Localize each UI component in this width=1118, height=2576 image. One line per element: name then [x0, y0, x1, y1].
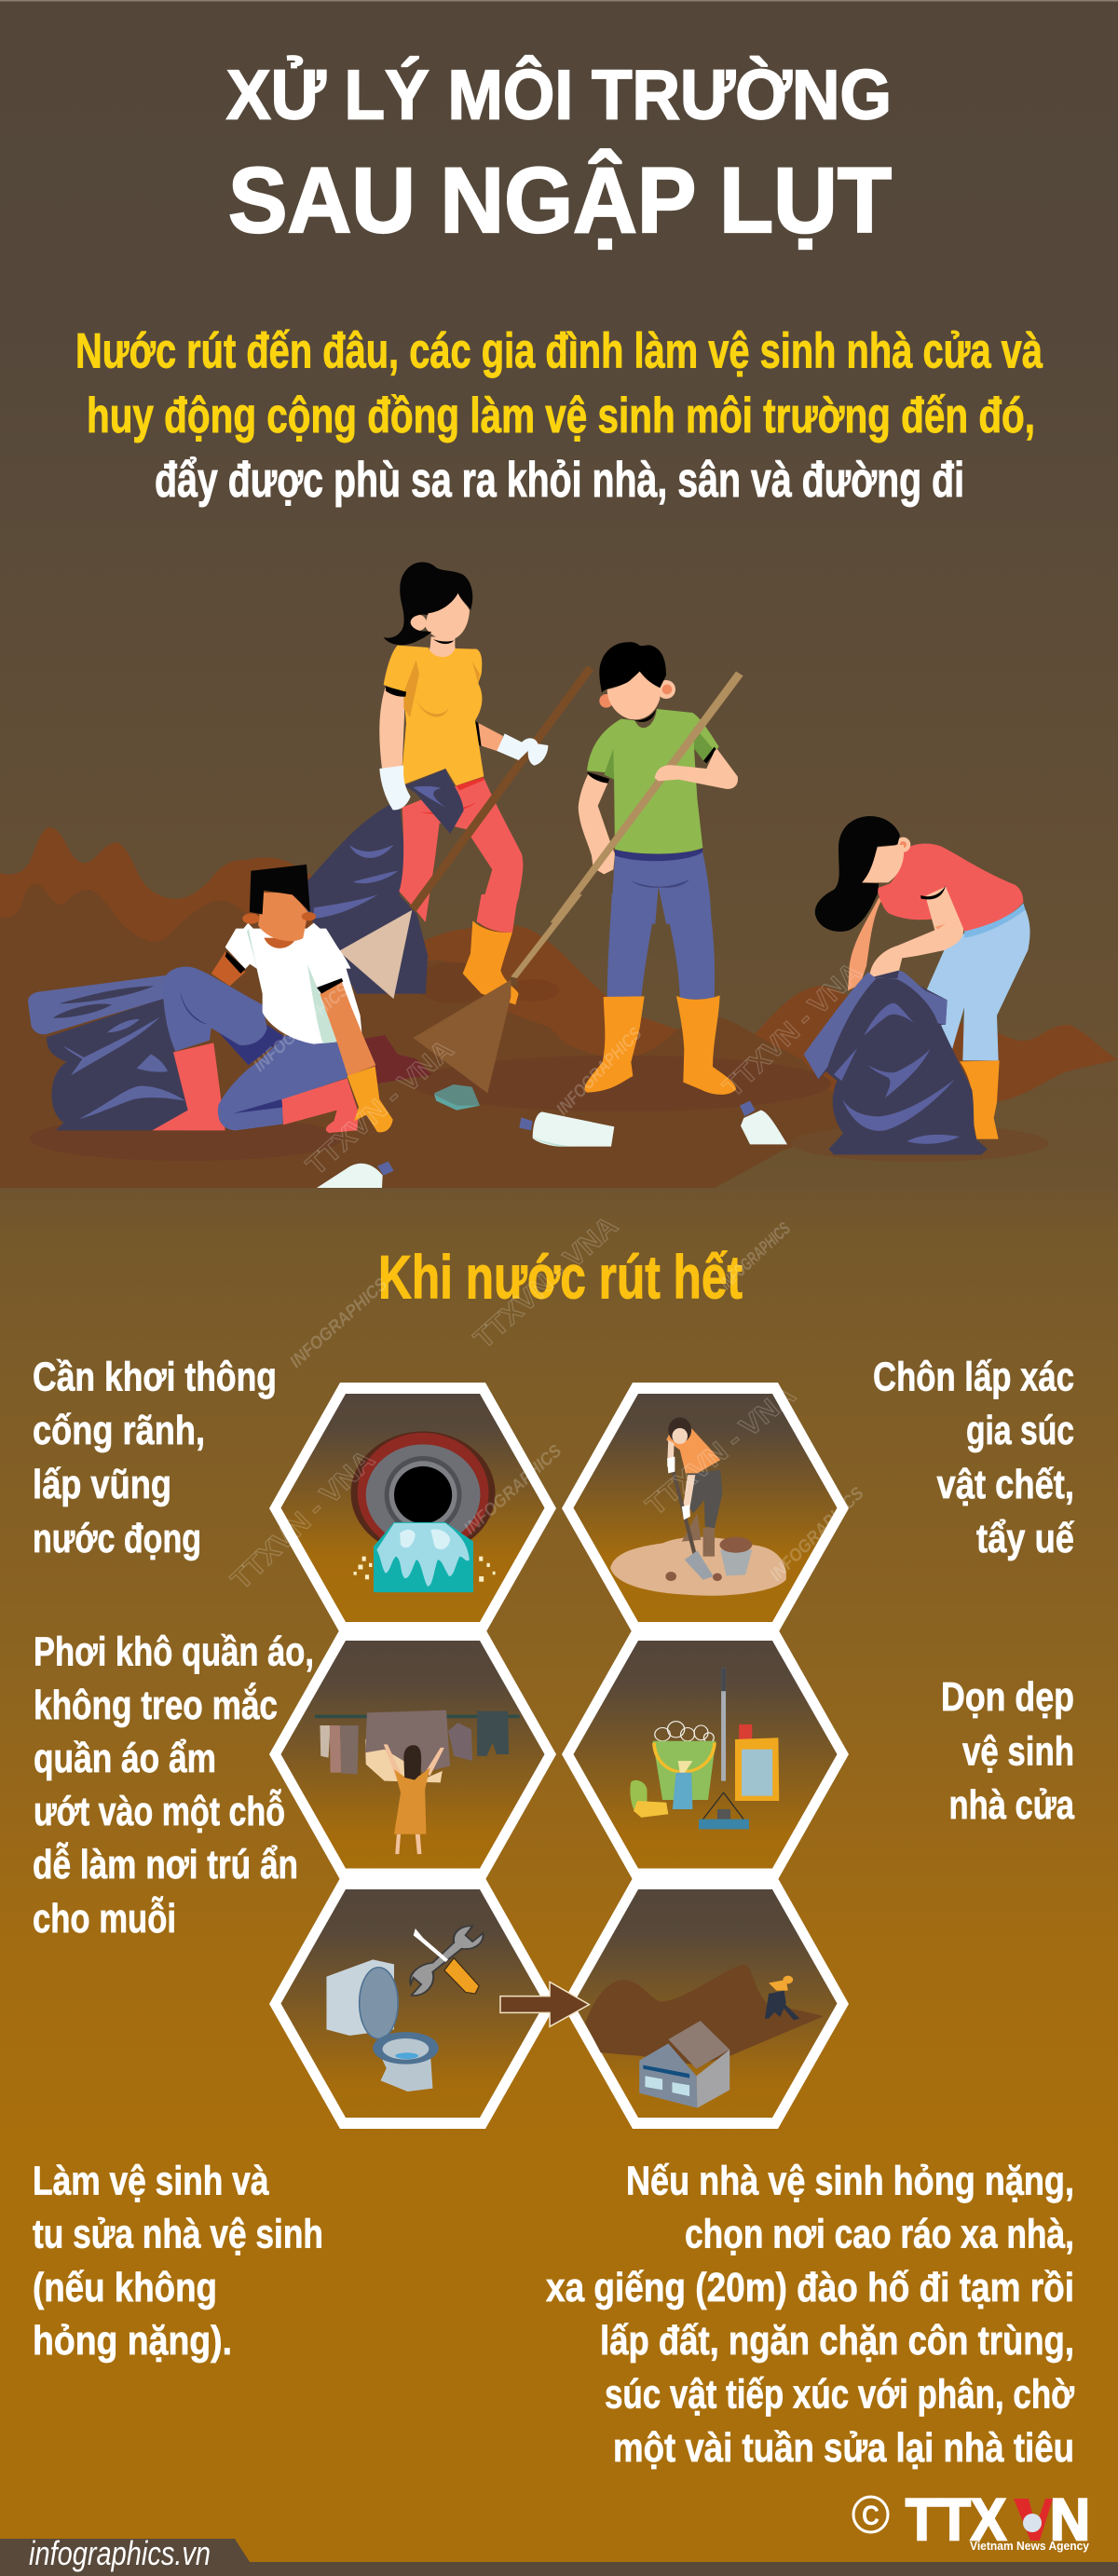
- text: clean house: [941, 1674, 1074, 1828]
- text: dry clothes: dễ làm nơi trú ẩn: [33, 1841, 298, 1888]
- title line 1: XỬ LÝ MÔI TRƯỜNG: [226, 56, 892, 134]
- hexagon: clean house: [562, 1629, 849, 1880]
- watermarks: TTXVN - VNA: [225, 1444, 381, 1596]
- text: clean house: nhà cửa: [948, 1782, 1074, 1828]
- text: bury carcasses: [873, 1355, 1074, 1561]
- text: clear drains: cống rãnh,: [33, 1408, 205, 1453]
- text: bury carcasses: tẩy uế: [976, 1516, 1074, 1561]
- footer site name: infographics.vn: [29, 2534, 211, 2572]
- text: clear drains: [33, 1355, 277, 1561]
- watermarks: TTXVN - VNA: [640, 1380, 801, 1521]
- watermarks: INFOGRAPHICS: [767, 1483, 868, 1586]
- logo: TTXVN: C: [862, 2501, 879, 2531]
- watermarks: INFOGRAPHICS: [286, 1274, 391, 1372]
- logo: TTXVN: Vietnam News Agency: [970, 2539, 1090, 2553]
- icon: cleaning supplies: [630, 1668, 779, 1829]
- text: dry clothes: ướt vào một chỗ: [34, 1788, 285, 1834]
- watermarks: TTXVN - VNA: [469, 1210, 624, 1355]
- watermarks: TTXVN - VNA: [301, 1034, 459, 1181]
- broom head tan: [339, 910, 412, 999]
- arrow: [500, 1982, 589, 2026]
- hexagon: bury carcasses: [562, 1383, 849, 1633]
- hexagon: clear drains: [269, 1383, 556, 1633]
- figure: man with green shirt: [413, 642, 743, 1095]
- watermarks: INFOGRAPHICS: [250, 980, 353, 1076]
- text: dry clothes: [33, 1629, 314, 1942]
- text: clean house: Dọn dẹp: [941, 1674, 1074, 1720]
- logo: TTXVN: [853, 2487, 1090, 2553]
- logo: TTXVN: N: [1050, 2487, 1090, 2553]
- text: dry clothes: Phơi khô quần áo,: [34, 1629, 314, 1675]
- ground: [0, 884, 841, 1188]
- icon: drain pipe with water: [351, 1431, 496, 1592]
- logo: TTXVN: TTX: [906, 2487, 1006, 2553]
- text: bury carcasses: vật chết,: [937, 1462, 1074, 1507]
- hexagon: dry clothes: [269, 1629, 556, 1880]
- hexagon: temporary latrine: [562, 1878, 849, 2129]
- text: temporary latrine: [546, 2158, 1075, 2471]
- watermarks: [225, 957, 868, 1596]
- section heading: Khi nước rút hết: [378, 1243, 743, 1312]
- intro text: [75, 324, 1043, 508]
- watermarks: INFOGRAPHICS: [552, 1024, 647, 1119]
- icon: house, hill and digger: [585, 1964, 824, 2108]
- title: [226, 56, 892, 252]
- text: repair toilet: (nếu không: [33, 2265, 217, 2310]
- text: dry clothes: cho muỗi: [33, 1895, 176, 1942]
- icon: woman hanging clothes: [315, 1711, 520, 1854]
- footer bar: [0, 2534, 1118, 2576]
- text: repair toilet: hỏng nặng).: [33, 2318, 232, 2364]
- text: repair toilet: tu sửa nhà vệ sinh: [33, 2212, 323, 2256]
- text: dry clothes: không treo mắc: [34, 1682, 278, 1728]
- text: repair toilet: Làm vệ sinh và: [33, 2158, 269, 2204]
- title line 2: SAU NGẬP LỤT: [228, 148, 892, 252]
- illustration: people cleaning up: [0, 562, 1118, 1188]
- figure: seated man with trash bag: [28, 865, 431, 1133]
- figure: woman with red shirt and trash bag: [804, 816, 1030, 1154]
- text: clean house: vệ sinh: [962, 1729, 1074, 1774]
- text: bury carcasses: gia súc: [966, 1408, 1074, 1453]
- icon: person digging: [610, 1417, 786, 1596]
- text: repair toilet: [33, 2158, 323, 2364]
- icon: toilet and tools: [326, 1926, 484, 2092]
- text: clear drains: nước đọng: [33, 1516, 201, 1561]
- hexagon: repair toilet: [269, 1878, 556, 2129]
- text: clear drains: lấp vũng: [33, 1462, 171, 1507]
- watermarks: INFOGRAPHICS: [716, 1219, 795, 1294]
- figure: woman with yellow shirt: [307, 562, 593, 1004]
- back hills: [0, 827, 1118, 1188]
- text: clear drains: Cần khơi thông: [33, 1355, 277, 1399]
- text: dry clothes: quần áo ẩm: [34, 1736, 216, 1781]
- shadows: [30, 1116, 343, 1161]
- watermarks: TTXVN - VNA: [717, 957, 867, 1103]
- watermarks: INFOGRAPHICS: [460, 1441, 566, 1539]
- litter: bottles and rock: [317, 1084, 787, 1188]
- big trash bag: [307, 799, 428, 994]
